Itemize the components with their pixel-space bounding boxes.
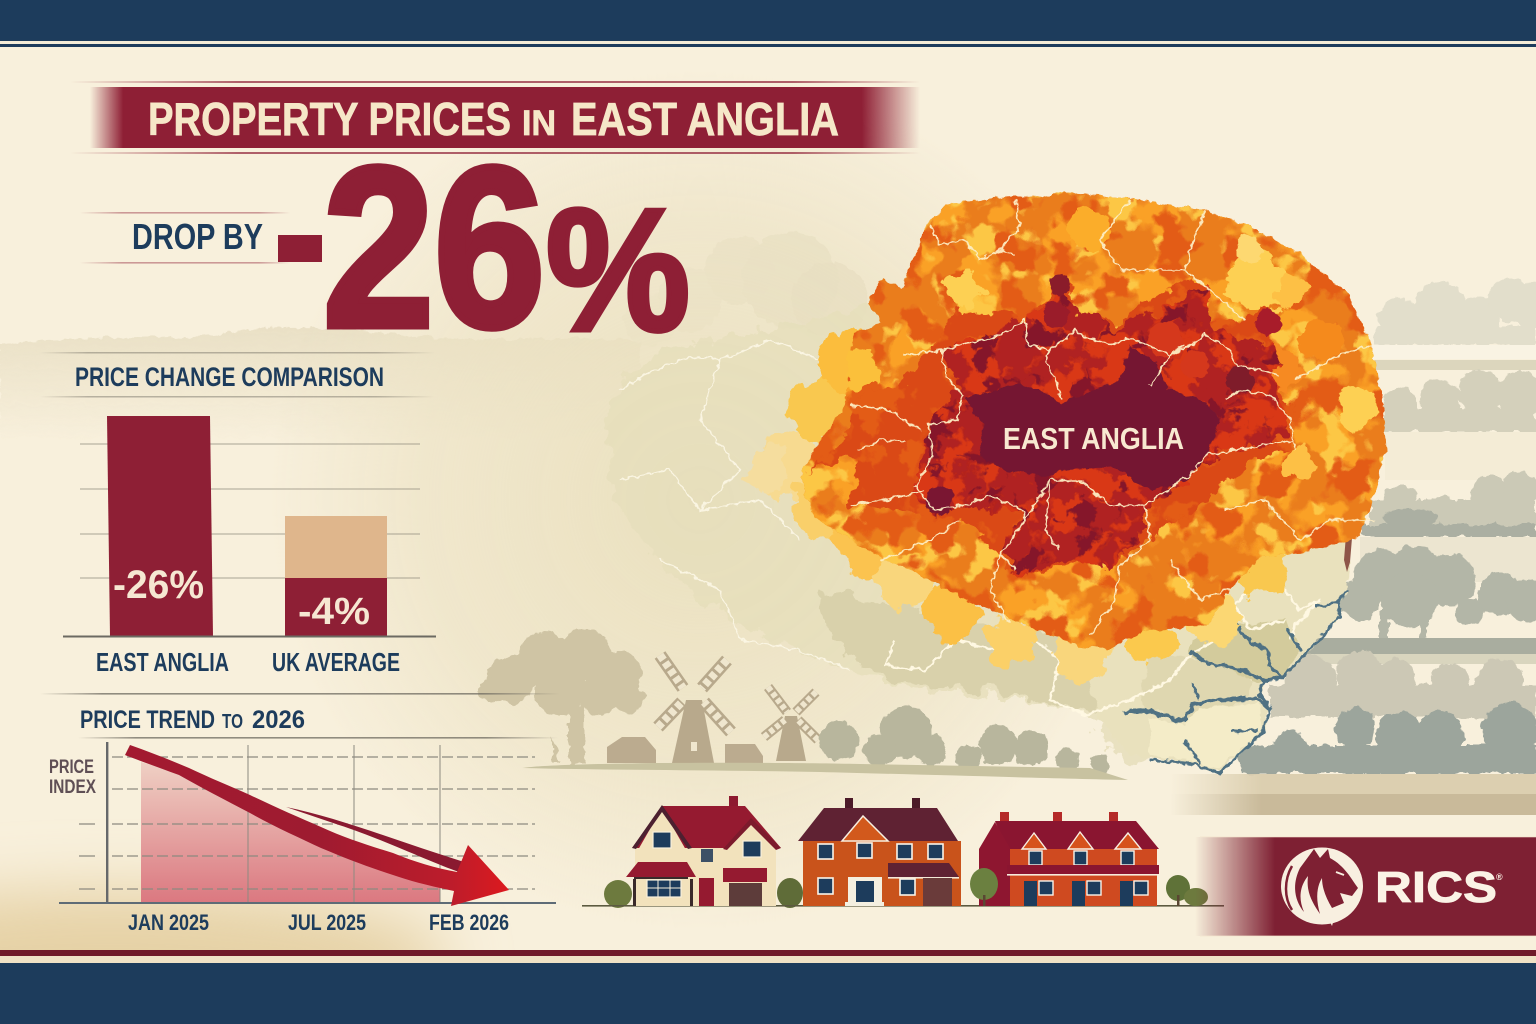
estuaries and coast (1125, 591, 1347, 773)
x axis labels (128, 910, 509, 935)
thin secondary arrow stroke (286, 807, 464, 872)
right landscape: fields and tree clusters (1170, 278, 1536, 815)
house 2 (798, 798, 961, 906)
y axis label: PRICE (49, 757, 94, 778)
map: East Anglia heat regions (748, 192, 1386, 683)
map label: EAST ANGLIA (1003, 421, 1184, 456)
title banner: EAST ANGLIA (571, 93, 839, 145)
coastal map boundaries (885, 580, 1320, 715)
trend heading: TO (222, 711, 243, 733)
trees, third band (1360, 472, 1536, 537)
RICS wordmark: RICS (1375, 863, 1497, 912)
RICS wordmark: ® (1496, 872, 1503, 882)
trend heading: PRICE TREND (80, 706, 215, 734)
dark foreground trees (1240, 702, 1536, 774)
map: red-orange belt (805, 280, 1295, 577)
panel: price change comparison (40, 352, 436, 677)
trend arrow (125, 745, 509, 906)
y axis label: INDEX (49, 777, 96, 798)
large oak cluster (1340, 546, 1536, 640)
house 1 (626, 796, 781, 906)
axes (59, 742, 556, 904)
pale map boundaries (620, 340, 850, 670)
map: outer orange land with patches (800, 192, 1386, 650)
trend chart area (141, 762, 440, 903)
bar: UK average (285, 516, 387, 636)
map: red spikes (926, 274, 1281, 514)
title banner: IN (522, 104, 556, 143)
bottom band (0, 950, 1536, 1024)
farm buildings (607, 737, 763, 763)
comparison heading: PRICE CHANGE COMPARISON (75, 362, 384, 392)
bottom left paper shading (0, 890, 450, 1024)
houses row (582, 796, 1224, 908)
headline: drop by -26% (80, 121, 690, 375)
y axis label (49, 757, 96, 798)
panel: price trend (40, 693, 560, 935)
left oak tree silhouette (478, 629, 644, 763)
title banner: PROPERTY PRICES (148, 93, 511, 145)
coast sliver (1344, 535, 1352, 572)
distant tree line (819, 706, 1110, 775)
garden trees (970, 868, 1208, 906)
bar labels: EAST ANGLIA (96, 647, 229, 677)
icon: RICS lion (1281, 848, 1363, 926)
pale mid tree band (1270, 651, 1536, 717)
RICS banner (1195, 836, 1536, 937)
bar labels (96, 647, 400, 677)
headline: drop by -26%: 26 (323, 121, 545, 375)
coastal land (1080, 535, 1352, 773)
x axis labels: JAN 2025 (128, 910, 209, 935)
bar: UK average: -4% (298, 591, 370, 633)
trees, second band (1382, 370, 1536, 432)
bar: East Anglia: -26% (113, 563, 204, 607)
top band (0, 0, 1536, 47)
windmill large (658, 655, 731, 763)
windmill small (764, 687, 818, 761)
left hazy hills (0, 232, 868, 440)
pale land of the wider map (609, 300, 1300, 770)
trend heading: 2026 (252, 706, 305, 734)
map: pale yellow fringe (748, 328, 1286, 683)
house 3 (979, 812, 1159, 906)
map: yellow highlight patches (842, 206, 1373, 481)
shrubs (604, 878, 803, 908)
bar: East Anglia (107, 416, 213, 636)
headline: drop by -26%: DROP BY (132, 216, 263, 257)
map: deep red belt (915, 287, 1290, 577)
headline: drop by -26%: % (546, 172, 690, 367)
x axis labels: JUL 2025 (288, 910, 366, 935)
haze behind map (270, 70, 1130, 930)
x axis labels: FEB 2026 (429, 910, 509, 935)
ground strip (522, 763, 1128, 780)
title banner (70, 81, 920, 154)
trees, far band (1375, 278, 1536, 345)
bar labels: UK AVERAGE (272, 647, 400, 677)
map: dark centre (964, 345, 1219, 490)
map: region boundaries (850, 200, 1375, 635)
